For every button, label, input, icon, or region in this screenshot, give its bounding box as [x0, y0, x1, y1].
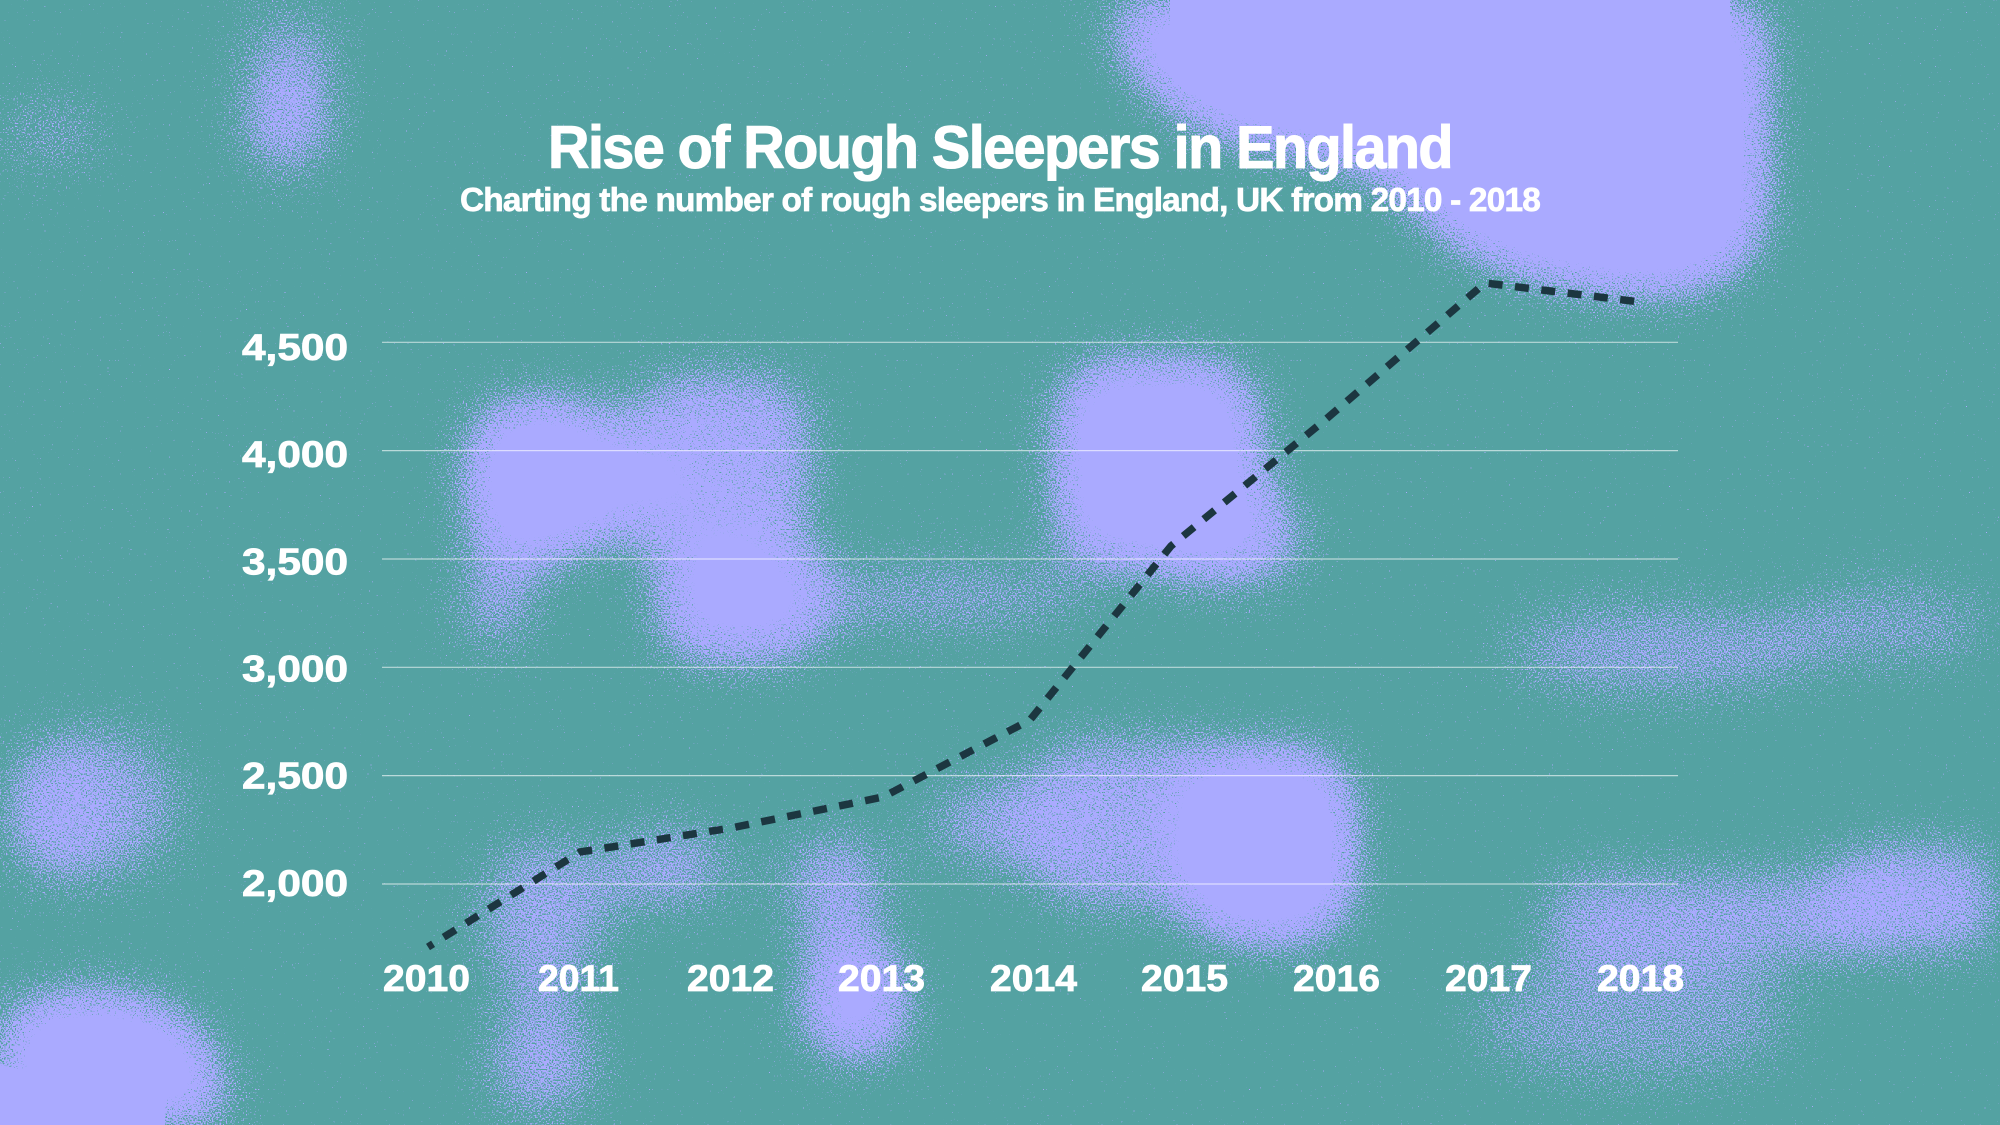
x-axis year labels: 2018 — [1597, 958, 1684, 999]
x-axis year labels: 2017 — [1445, 958, 1532, 999]
x-axis year labels — [383, 958, 1684, 999]
x-axis year labels: 2010 — [383, 958, 470, 999]
x-axis year labels: 2013 — [838, 958, 925, 999]
y-axis labels: 2,000 — [242, 863, 348, 904]
x-axis year labels: 2012 — [687, 958, 774, 999]
x-axis year labels: 2011 — [538, 958, 619, 999]
y-axis labels: 4,000 — [242, 434, 348, 475]
title: Rise of Rough Sleepers in England — [548, 114, 1452, 181]
line chart — [242, 283, 1684, 999]
x-axis year labels: 2016 — [1293, 958, 1380, 999]
horizontal grid lines — [382, 342, 1678, 884]
y-axis labels: 4,500 — [242, 327, 348, 368]
dashed data line — [428, 283, 1640, 947]
y-axis labels: 3,000 — [242, 648, 348, 690]
y-axis labels: 3,500 — [242, 542, 348, 582]
x-axis year labels: 2015 — [1141, 958, 1228, 999]
x-axis year labels: 2014 — [990, 958, 1077, 999]
y-axis labels: 2,500 — [242, 756, 348, 796]
y-axis labels — [242, 327, 348, 904]
subtitle: Charting the number of rough sleepers in England, UK from 2010 - 2018 — [460, 181, 1540, 218]
